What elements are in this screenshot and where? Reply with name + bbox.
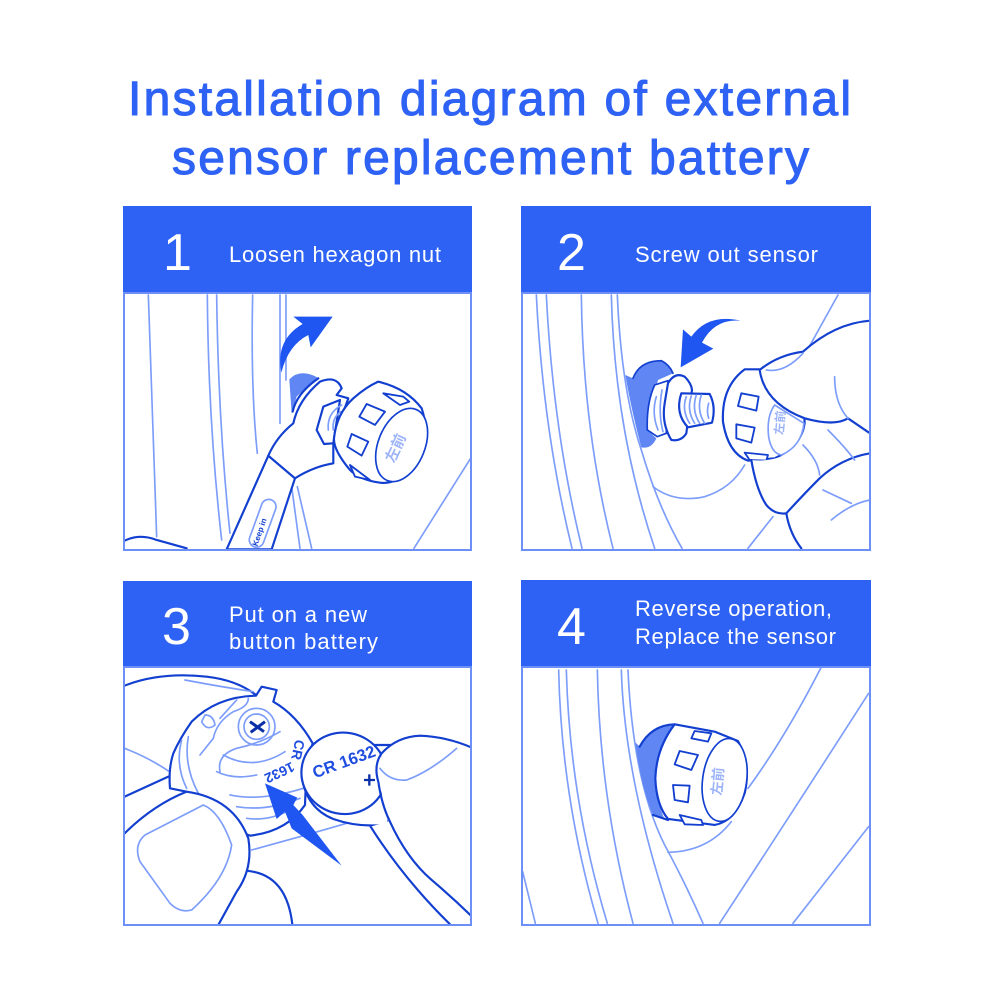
panel: step 2 bbox=[521, 206, 871, 550]
opened sensor housing bbox=[170, 687, 313, 836]
panel: step 3 bbox=[123, 581, 472, 925]
sensor bbox=[723, 369, 805, 461]
step 2 header bbox=[521, 206, 871, 293]
step 1 illustration: wrench on sensor: Keep in bbox=[251, 517, 269, 547]
panel: step 1 bbox=[123, 206, 472, 550]
step 2 frame bbox=[522, 293, 870, 550]
battery label on housing bbox=[264, 740, 304, 782]
step 4 header: Replace the sensor bbox=[635, 624, 836, 649]
step 4 illustration: sensor reinstalled: 左前 bbox=[708, 767, 727, 796]
title: Installation diagram of external bbox=[128, 73, 851, 126]
sensor mount bbox=[635, 724, 675, 819]
right fingertip and tool bbox=[364, 736, 472, 925]
coin battery: CR 1632 bbox=[310, 742, 378, 782]
sensor body bbox=[655, 724, 747, 825]
step 3 header: button battery bbox=[229, 629, 378, 654]
step 3 header bbox=[123, 581, 472, 667]
step 2 illustration: unscrewing sensor by hand: 左前 bbox=[771, 410, 788, 435]
title: sensor replacement battery bbox=[172, 132, 809, 185]
index finger bbox=[751, 430, 870, 550]
arrow: insert direction bbox=[265, 783, 342, 866]
step 3 header: Put on a new bbox=[229, 602, 367, 627]
coin battery bbox=[300, 732, 392, 826]
step 2 header: 2 bbox=[557, 224, 586, 282]
step 3 illustration: inserting battery bbox=[125, 675, 472, 925]
battery label on housing: 1632 bbox=[262, 759, 297, 787]
step 3 frame bbox=[124, 667, 471, 925]
arrow: screw out direction bbox=[681, 319, 741, 367]
sensor face bbox=[701, 738, 748, 822]
wrench bbox=[227, 456, 295, 549]
step 1 header bbox=[123, 206, 472, 293]
step 2 illustration: unscrewing sensor by hand bbox=[536, 295, 870, 550]
threaded stud bbox=[679, 393, 714, 427]
arrow: loosen direction bbox=[280, 317, 333, 373]
step 1 illustration: wrench on sensor bbox=[125, 295, 471, 549]
step 4 frame bbox=[522, 667, 870, 925]
step 1 frame bbox=[124, 293, 471, 550]
mount disc bbox=[625, 361, 673, 448]
battery label on housing: CR bbox=[288, 738, 308, 761]
step 1 header: Loosen hexagon nut bbox=[229, 242, 441, 267]
step 4 header: 4 bbox=[557, 598, 586, 656]
step 1 header: 1 bbox=[163, 224, 192, 282]
step 3 header: 3 bbox=[162, 598, 191, 656]
panel: step 4 bbox=[521, 580, 871, 925]
step 4 header: Reverse operation, bbox=[635, 596, 832, 621]
title bbox=[128, 73, 851, 185]
step 4 header bbox=[521, 580, 871, 667]
hex nut bbox=[664, 375, 692, 440]
thumb bbox=[760, 321, 870, 433]
step 4 illustration: sensor reinstalled bbox=[523, 668, 869, 923]
sensor cap bbox=[334, 382, 425, 483]
screw bbox=[238, 708, 275, 745]
step 1 illustration: wrench on sensor: 左前 bbox=[381, 431, 410, 465]
left fingers bbox=[125, 792, 292, 925]
step 2 header: Screw out sensor bbox=[635, 242, 818, 267]
